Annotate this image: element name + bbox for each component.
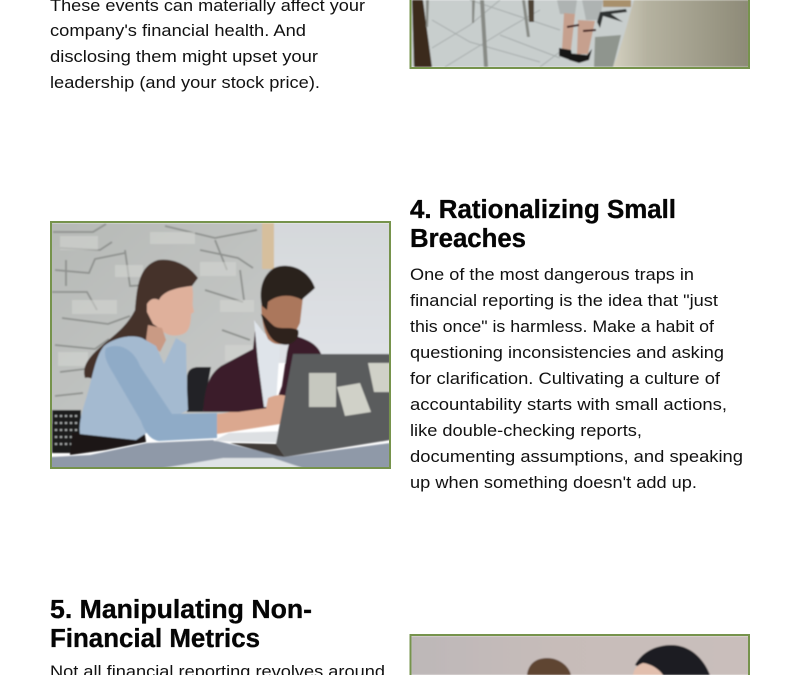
paper <box>213 431 287 443</box>
text block: section 4 paragraph: up when something doesn't add up. <box>410 473 697 492</box>
text block: section 4 paragraph: questioning inconsistencies and asking <box>410 343 724 362</box>
text block: section 3 closing paragraph: disclosing them might upset your <box>50 47 318 66</box>
laptop <box>276 354 390 457</box>
heading: 4. Rationalizing Small Breaches: 4. Rationalizing Small <box>410 196 676 224</box>
photo: woman and man reviewing work at a laptop <box>51 222 390 468</box>
hand <box>265 394 286 409</box>
photo: office floor with chairs and sandals <box>410 0 749 68</box>
text block: section 4 paragraph <box>410 265 743 492</box>
woman skirt <box>70 429 146 455</box>
text block: section 4 paragraph: like double-checking reports, <box>410 421 642 440</box>
text block: section 4 paragraph: this once" is harmless. Make a habit of <box>410 317 714 336</box>
text block: section 3 closing paragraph <box>50 0 365 92</box>
text block: section 4 paragraph: documenting assumptions, and speaking <box>410 447 743 466</box>
table <box>51 440 390 468</box>
man shirt <box>254 320 280 407</box>
text block: section 3 closing paragraph: company's financial health. And <box>50 21 306 40</box>
woman forearm <box>216 408 282 435</box>
photo: two people against a pale wall <box>410 635 749 675</box>
text block: section 4 paragraph: for clarification. Cultivating a culture of <box>410 369 720 388</box>
text block: section 4 paragraph: financial reporting is the idea that "just <box>410 291 718 310</box>
man jacket <box>203 322 324 412</box>
woman blouse <box>80 336 188 440</box>
woman sleeve <box>105 346 217 441</box>
man neck & face <box>261 289 303 344</box>
heading: 4. Rationalizing Small Breaches <box>410 196 676 253</box>
man hair <box>261 266 315 310</box>
woman neck <box>146 325 166 352</box>
brick texture <box>52 224 257 396</box>
woman hair <box>84 260 198 384</box>
heading: 5. Manipulating Non-Financial Metrics <box>50 596 312 653</box>
heading: 5. Manipulating Non-Financial Metrics: 5. Manipulating Non- <box>50 596 312 624</box>
man beard <box>261 314 299 345</box>
heading: 5. Manipulating Non-Financial Metrics: Financial Metrics <box>50 625 260 653</box>
text block: section 4 paragraph: accountability starts with small actions, <box>410 395 727 414</box>
woman face <box>147 286 194 336</box>
heading: 4. Rationalizing Small Breaches: Breaches <box>410 225 526 253</box>
chair <box>187 367 211 412</box>
text block: section 4 paragraph: One of the most dangerous traps in <box>410 265 694 284</box>
text block: section 3 closing paragraph: leadership (and your stock price). <box>50 73 320 92</box>
